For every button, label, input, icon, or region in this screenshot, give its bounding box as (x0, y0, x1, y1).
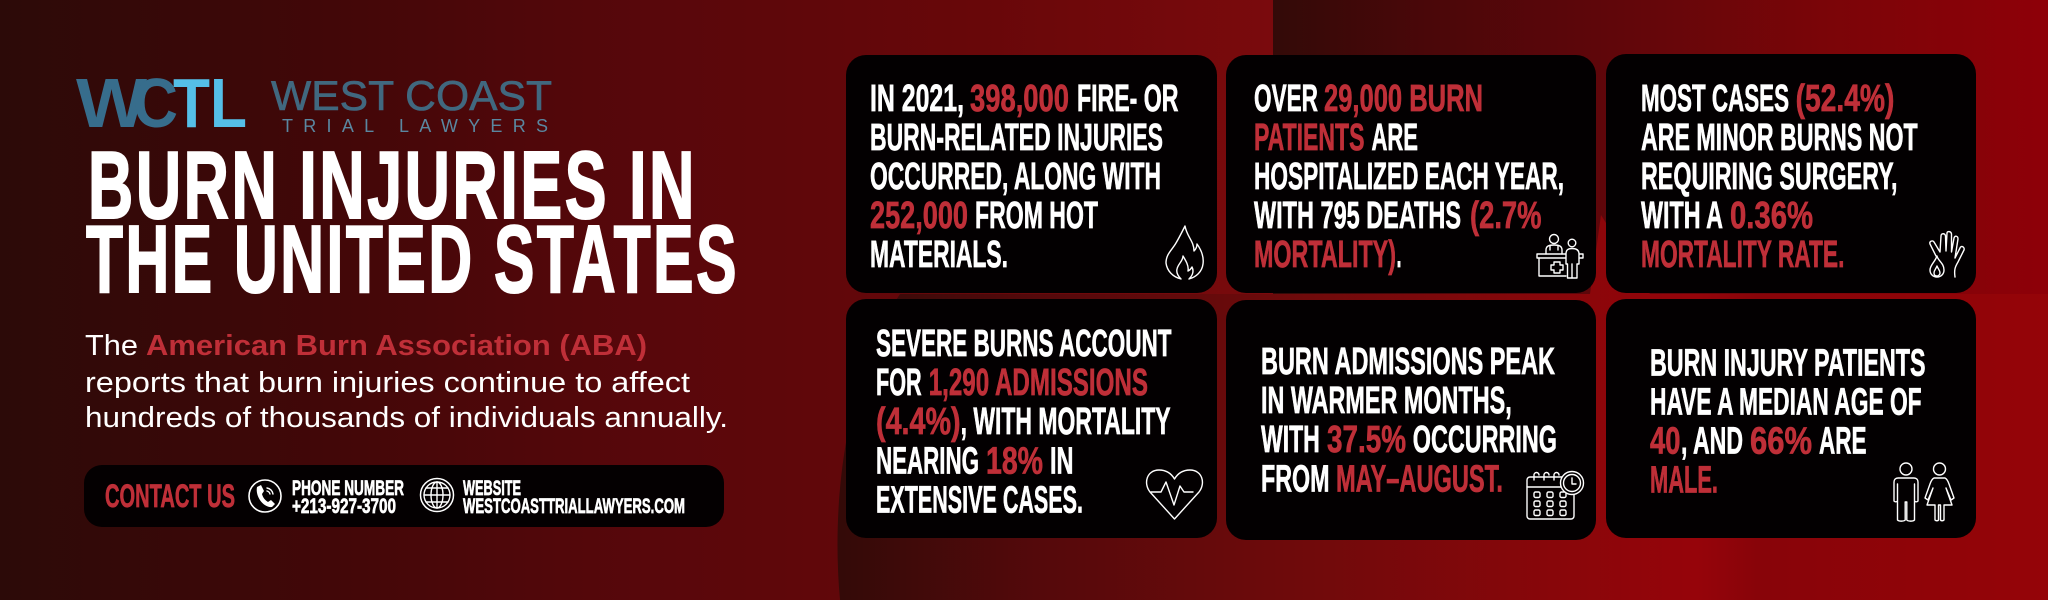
icon: phone (249, 480, 281, 512)
phone details (292, 477, 404, 518)
icon: flame (1166, 226, 1203, 279)
panel: hospitalizations (1226, 55, 1596, 293)
intro paragraph: hundreds of thousands of individuals annually. (85, 402, 728, 434)
panel text: MAY–AUGUST. (1336, 458, 1503, 500)
panel: demographics (1606, 299, 1976, 538)
logo subtitle: TRIAL LAWYERS (282, 116, 548, 136)
panel text: , WITH MORTALITY (961, 401, 1171, 443)
panel text: SEVERE BURNS ACCOUNT (876, 323, 1172, 365)
panel: minor burns (1606, 54, 1976, 293)
contact heading: CONTACT US (105, 478, 235, 514)
panel: 2021 injuries (846, 55, 1217, 293)
phone details: +213-927-3700 (292, 495, 396, 518)
website details: WEBSITE (463, 477, 521, 500)
panel text: 0.36% (1730, 195, 1813, 237)
intro paragraph: American Burn Association (ABA) (146, 330, 647, 362)
panel text: MORTALITY) (1254, 234, 1396, 276)
intro paragraph: The (85, 330, 138, 362)
panel text: (52.4%) (1796, 78, 1894, 120)
panel text: 37.5% (1327, 419, 1406, 461)
panel: severe burns (846, 299, 1217, 538)
icon: globe (420, 478, 454, 512)
panel text: BURN ADMISSIONS PEAK (1261, 341, 1555, 383)
panel text: , AND (1681, 420, 1743, 462)
panel text: WITH 795 DEATHS (1254, 195, 1461, 237)
logo name: WEST COAST (271, 72, 552, 119)
panel text: FIRE- OR (1077, 78, 1178, 120)
panel text: EXTENSIVE CASES. (876, 480, 1083, 522)
phone details: PHONE NUMBER (292, 477, 404, 500)
panel: seasonal peak (1226, 300, 1596, 540)
logo mark (76, 64, 247, 142)
panel text (1254, 78, 1564, 276)
website details: WESTCOASTTRIALLAWYERS.COM (463, 495, 685, 518)
icon: doctor at desk (1537, 234, 1583, 278)
panel text: 252,000 (870, 195, 968, 237)
panel text: OCCURRED, ALONG WITH (870, 156, 1161, 198)
website details (463, 477, 685, 518)
panel text: 66% (1750, 420, 1812, 462)
icon: calendar clock (1527, 472, 1584, 519)
panel text: BURN-RELATED INJURIES (870, 117, 1163, 159)
intro paragraph: reports that burn injuries continue to affect (85, 367, 690, 399)
logo mark: TL (173, 64, 247, 142)
panel text: REQUIRING SURGERY, (1641, 156, 1898, 198)
panel text: IN WARMER MONTHS, (1261, 380, 1512, 422)
icon: burned hand (1930, 232, 1964, 277)
icon: man and woman (1894, 463, 1954, 521)
panel text (870, 78, 1178, 276)
panel text: MORTALITY RATE. (1641, 234, 1844, 276)
panel text: OCCURRING (1413, 419, 1557, 461)
panel text: WITH A (1641, 195, 1723, 237)
intro paragraph (85, 330, 728, 434)
panel text: 398,000 (970, 78, 1069, 120)
panel text: FROM (1261, 458, 1330, 500)
panel text: MALE. (1650, 460, 1718, 502)
panel text: 29,000 BURN (1324, 78, 1483, 120)
panel text: NEARING (876, 440, 979, 482)
contact bar (84, 465, 724, 527)
panel text (876, 323, 1172, 522)
panel text: FOR (876, 362, 922, 404)
title (86, 132, 739, 313)
panel text: (4.4%) (876, 401, 961, 443)
panel text: 40 (1650, 420, 1680, 462)
panel text: HOSPITALIZED EACH YEAR, (1254, 156, 1564, 198)
panel text (1650, 342, 1926, 502)
icon: heart pulse (1147, 470, 1202, 519)
panel text: MOST CASES (1641, 78, 1789, 120)
panel text: ARE (1372, 117, 1418, 159)
panel text: . (1396, 234, 1402, 276)
panel text (1261, 341, 1557, 500)
panel text: IN 2021, (870, 78, 964, 120)
logo mark: C (133, 64, 178, 142)
panel text: MATERIALS. (870, 234, 1008, 276)
panel text (1641, 78, 1918, 276)
panel text: WITH (1261, 419, 1320, 461)
panel text: ARE (1819, 420, 1866, 462)
panel text: PATIENTS (1254, 117, 1364, 159)
panel text: 18% (986, 440, 1043, 482)
title: BURN INJURIES IN (88, 132, 697, 239)
panel text: FROM HOT (975, 195, 1098, 237)
panel text: OVER (1254, 78, 1318, 120)
title: THE UNITED STATES (86, 206, 739, 313)
panel text: IN (1050, 440, 1074, 482)
logo (76, 64, 552, 142)
panel text: (2.7% (1470, 195, 1542, 237)
logo mark: W (76, 64, 147, 142)
panel text: 1,290 ADMISSIONS (929, 362, 1148, 404)
